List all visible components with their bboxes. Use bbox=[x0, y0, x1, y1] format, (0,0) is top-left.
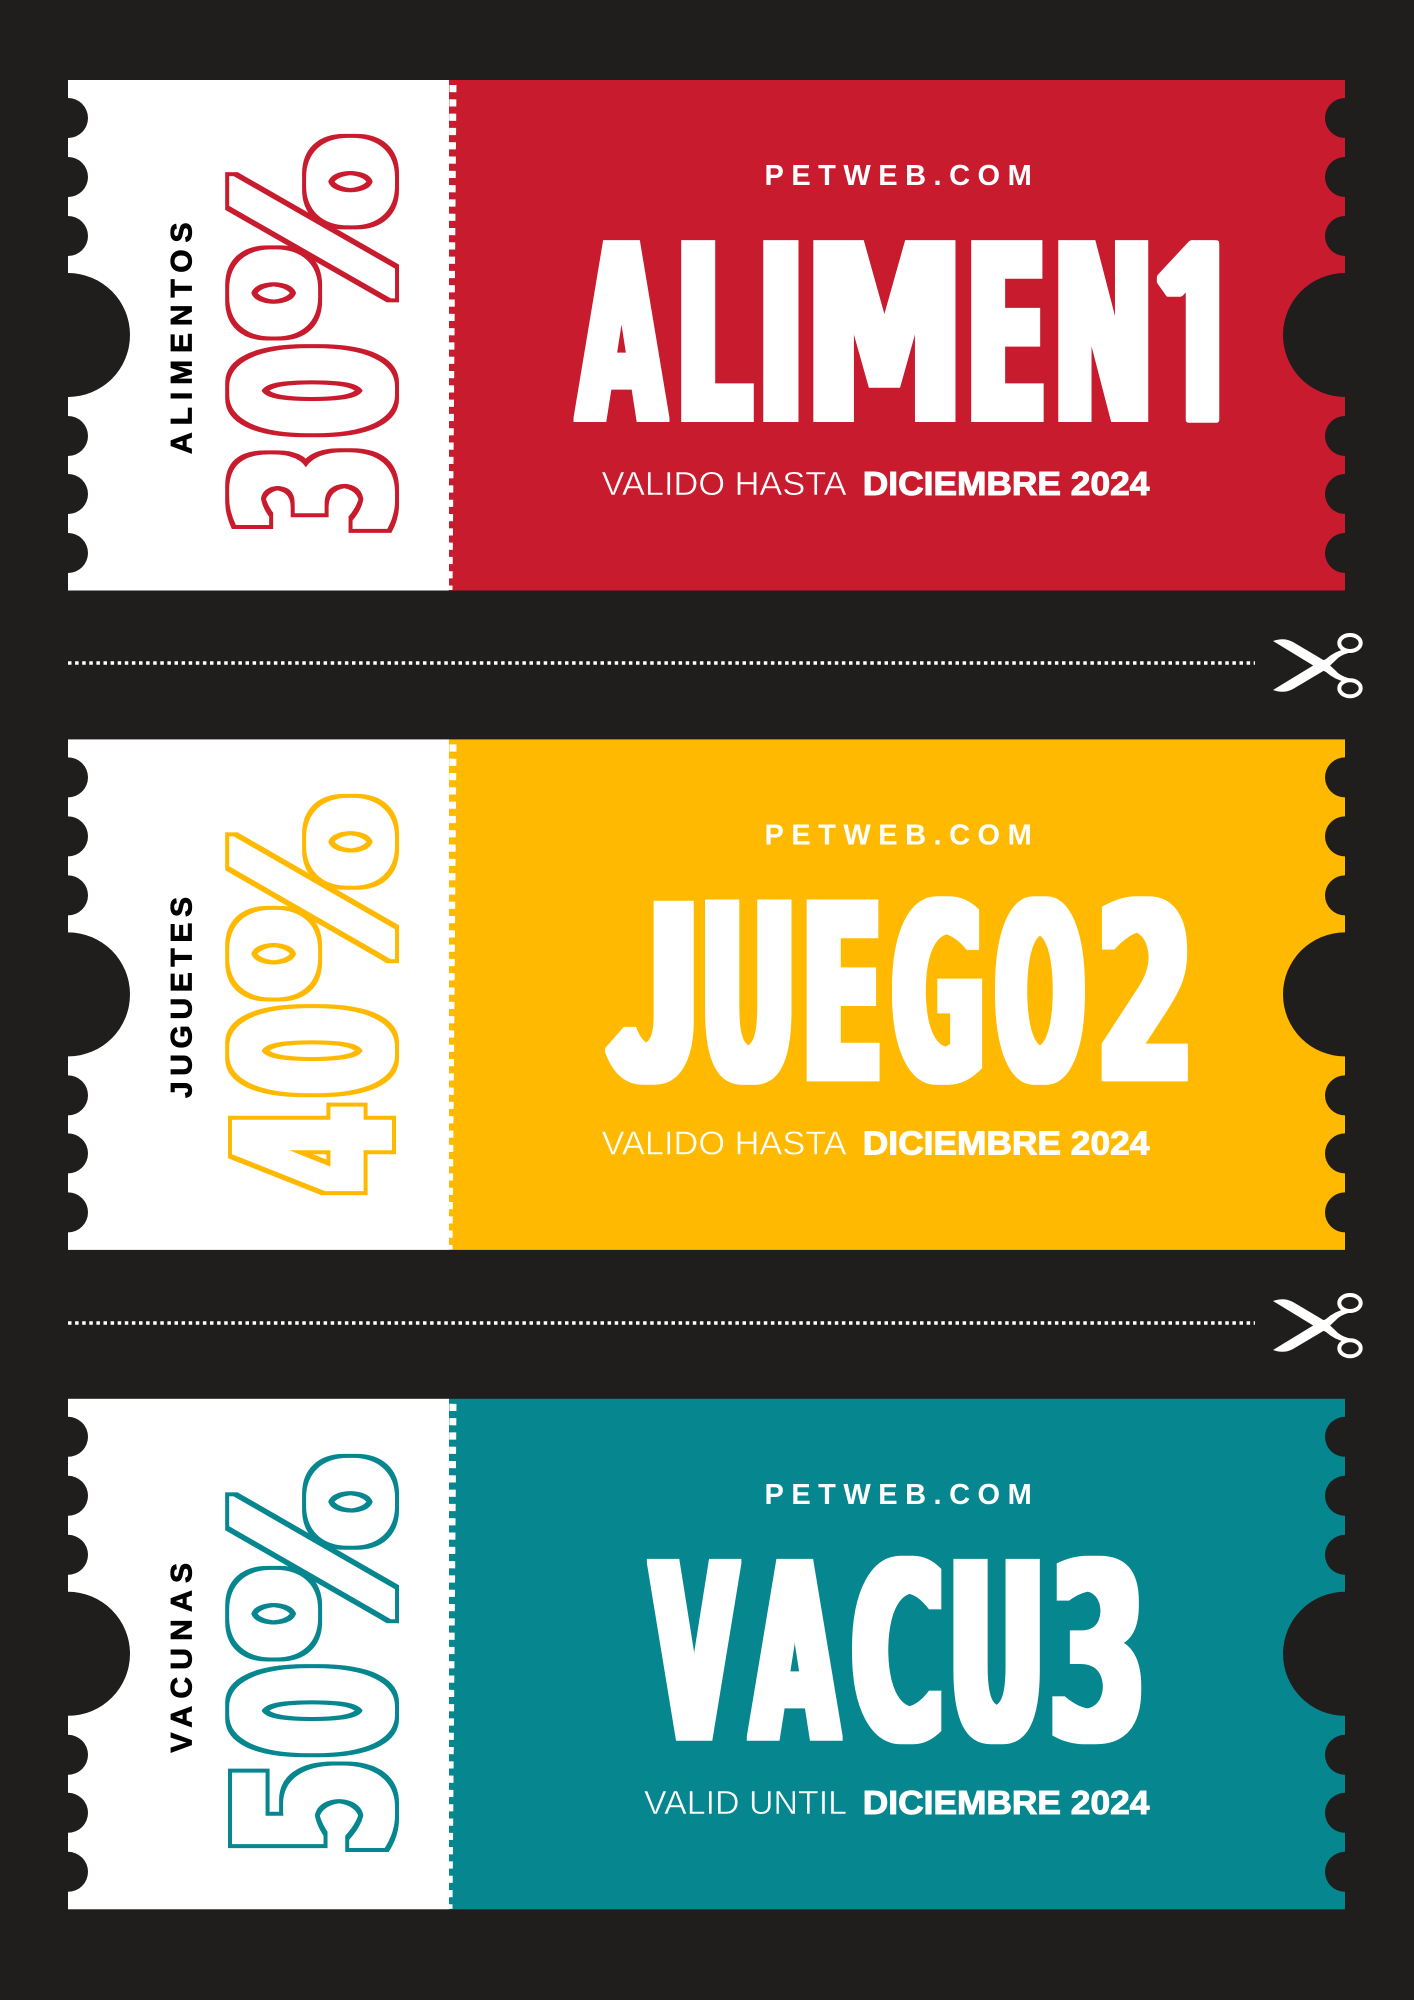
notches bbox=[6, 1417, 1407, 1892]
website: PETWEB.COM bbox=[764, 819, 1039, 851]
discount outline: 4 bbox=[192, 1105, 441, 1193]
coupon code: A bbox=[579, 194, 664, 478]
validity: VALIDO HASTA bbox=[602, 465, 847, 502]
discount outline: 0 bbox=[192, 346, 441, 435]
discount outline: 0 bbox=[192, 1006, 441, 1095]
cut line 2 bbox=[68, 1321, 1255, 1325]
panel: white stub bbox=[68, 739, 449, 1250]
coupon code: M bbox=[805, 194, 964, 478]
validity bbox=[602, 465, 1150, 502]
icon: scissors 1 bbox=[1273, 635, 1361, 696]
discount outline: % bbox=[192, 1455, 441, 1660]
coupon code: G bbox=[892, 853, 984, 1137]
panel: yellow coupon body bbox=[449, 739, 1345, 1250]
ticket: alimentos bbox=[6, 80, 1407, 590]
coupon code: I bbox=[758, 194, 804, 478]
validity bbox=[602, 1124, 1150, 1161]
validity: DICIEMBRE 2024 bbox=[863, 465, 1150, 502]
discount outline: 3 bbox=[192, 446, 441, 533]
validity: VALIDO HASTA bbox=[602, 1124, 847, 1161]
validity: DICIEMBRE 2024 bbox=[863, 1124, 1150, 1161]
panel: red coupon body bbox=[449, 80, 1345, 590]
category label: VACUNAS bbox=[165, 1563, 198, 1753]
discount outline bbox=[192, 1455, 441, 1854]
ticket: juguetes bbox=[6, 739, 1407, 1250]
cut line 1 bbox=[68, 661, 1255, 665]
category label: JUGUETES bbox=[165, 897, 198, 1098]
discount outline bbox=[192, 135, 441, 533]
discount outline bbox=[192, 795, 441, 1193]
coupon code: L bbox=[676, 194, 751, 478]
coupon code: J bbox=[608, 805, 700, 1148]
coupon code: V bbox=[652, 1513, 736, 1797]
discount outline: % bbox=[192, 135, 441, 339]
validity bbox=[644, 1784, 1150, 1821]
website: PETWEB.COM bbox=[764, 160, 1039, 192]
coupon code: 2 bbox=[1097, 853, 1194, 1137]
notches bbox=[6, 757, 1407, 1232]
coupon code: E bbox=[966, 194, 1046, 478]
coupon code: N bbox=[1053, 194, 1153, 478]
panel: teal coupon body bbox=[449, 1399, 1345, 1909]
ticket: vacunas bbox=[6, 1399, 1407, 1909]
coupon code: 3 bbox=[1049, 1513, 1146, 1797]
category label: ALIMENTOS bbox=[165, 222, 198, 454]
coupon code: C bbox=[852, 1513, 943, 1797]
validity: DICIEMBRE 2024 bbox=[863, 1784, 1150, 1821]
discount outline: 5 bbox=[192, 1760, 441, 1855]
coupon code: U bbox=[700, 853, 796, 1137]
panel: white stub bbox=[68, 1399, 449, 1909]
discount outline: 0 bbox=[192, 1666, 441, 1755]
coupon code: 1 bbox=[1137, 223, 1259, 456]
icon: scissors 2 bbox=[1273, 1295, 1361, 1356]
website: PETWEB.COM bbox=[764, 1479, 1039, 1511]
coupon code: E bbox=[802, 853, 882, 1137]
coupon code: O bbox=[996, 853, 1084, 1137]
validity: VALID UNTIL bbox=[644, 1784, 847, 1821]
coupon code: A bbox=[752, 1513, 837, 1797]
discount outline: % bbox=[192, 795, 441, 1000]
coupon code: U bbox=[948, 1513, 1045, 1797]
notches bbox=[6, 98, 1407, 573]
panel: white stub bbox=[68, 80, 449, 590]
